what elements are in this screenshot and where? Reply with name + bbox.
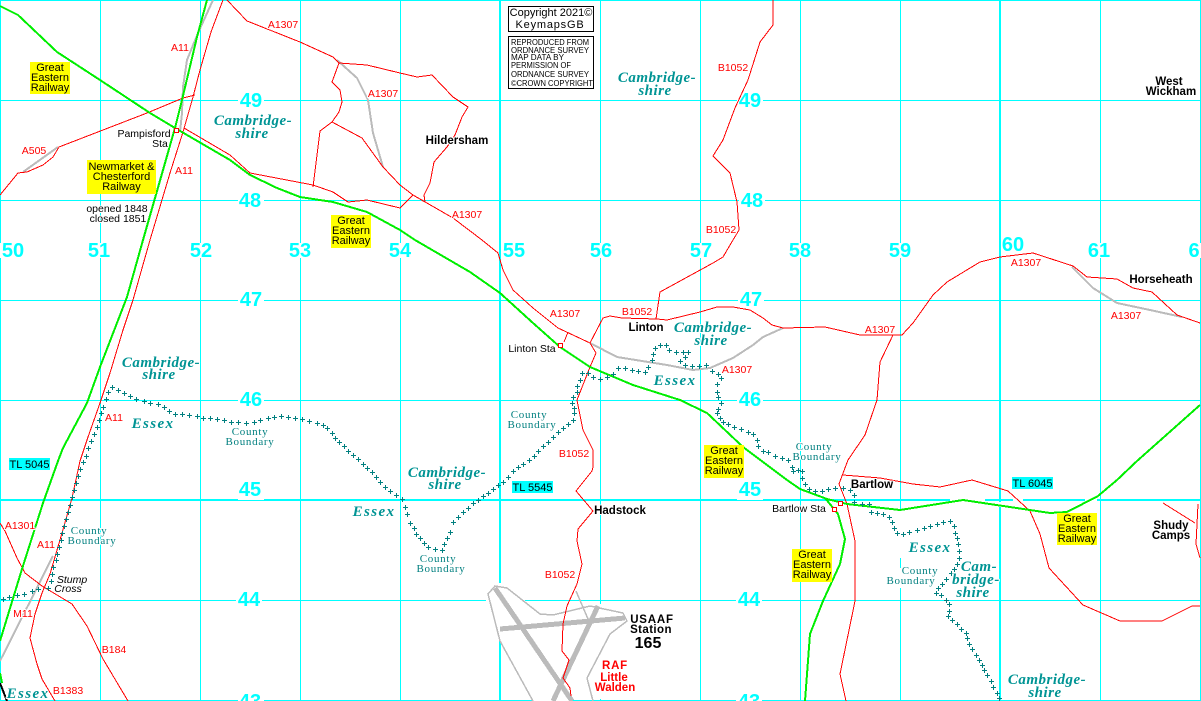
label: Great Eastern Railway, east: Great: [1063, 513, 1091, 525]
label: Great Eastern Railway, Bartlow: Eastern: [793, 559, 831, 571]
road: A1307 east: [590, 253, 1200, 343]
road labels: B1052: [718, 62, 748, 74]
county labels: Cambridgeshire: Cambridge-: [674, 320, 752, 336]
label: Great Eastern Railway, Linton: [704, 445, 744, 478]
county boundary labels: Boundary: [417, 563, 465, 575]
county labels: Essex: Essex: [653, 373, 696, 389]
road: B1052 north: [656, 0, 773, 319]
county labels: Essex: Essex: [352, 504, 395, 520]
county labels: Essex: Essex: [131, 416, 174, 432]
Ordnance Survey permission box: [508, 36, 594, 88]
grid numbers: 44: [238, 589, 261, 611]
grid numbers: 45: [239, 479, 261, 501]
station markers: [174, 128, 842, 512]
county boundary labels: [68, 409, 938, 587]
grid numbers: 54: [389, 240, 412, 262]
road labels: A1307: [452, 209, 482, 221]
grid numbers: 47: [740, 289, 762, 311]
label: USAAF Station 165: USAAF: [630, 614, 674, 626]
road labels: A1307: [1011, 257, 1041, 269]
label: Great Eastern Railway, west: Railway: [31, 82, 70, 94]
grid square labels: TL 5045: [10, 459, 49, 471]
grid numbers: 57: [690, 240, 712, 262]
railway dates and station names: closed 1851: [90, 213, 146, 225]
label: Great Eastern Railway, Bartlow: Railway: [793, 569, 832, 581]
county labels: Cambridgeshire: Cambridge-: [122, 355, 200, 371]
place names: [426, 76, 1196, 542]
county labels: Cambridgeshire: Cambridge-: [408, 465, 486, 481]
place names: Wickham: [1146, 86, 1196, 98]
road labels: A1307: [722, 364, 752, 376]
road labels: A11: [171, 42, 189, 54]
grid numbers: 61: [1088, 240, 1110, 262]
label: USAAF Station 165: 165: [635, 635, 661, 652]
grid numbers: 59: [889, 240, 911, 262]
Ordnance Survey permission box: REPRODUCED FROM: [511, 38, 589, 47]
railway dates and station names: [86, 128, 826, 515]
county labels: Cambridgeshire: shire: [955, 585, 990, 601]
grid numbers: 56: [590, 240, 612, 262]
road: A1307 to Linton: [184, 128, 590, 343]
road: A1307 west: [227, 0, 468, 202]
place name: Stump Cross: Cross: [54, 583, 82, 595]
road labels: B184: [102, 644, 126, 656]
label: Newmarket and Chesterford Railway: Chesterford: [93, 171, 150, 183]
railway: Great Eastern main line: [0, 6, 1200, 513]
grid square labels: TL 5545: [513, 482, 552, 494]
county labels: Cambridgeshire: shire: [234, 126, 269, 142]
road: Shudy Camps: [1163, 503, 1195, 523]
railway: Bartlow branch: [805, 498, 845, 701]
county labels: Cambridgeshire: shire: [427, 477, 462, 493]
place names: Horseheath: [1129, 274, 1193, 286]
grid numbers: 45: [739, 479, 761, 501]
county boundary labels: Boundary: [508, 419, 556, 431]
label: Newmarket and Chesterford Railway: Railway: [102, 181, 141, 193]
county boundary labels: County: [511, 409, 547, 421]
label: USAAF Station 165: Station: [630, 624, 672, 636]
road labels: B1052: [706, 224, 736, 236]
copyright box: KeymapsGB: [516, 19, 584, 31]
road labels: A505: [22, 145, 46, 157]
county labels: Cambridgeshire: shire: [1027, 685, 1062, 701]
grid numbers: 44: [738, 589, 761, 611]
railway dates and station names: Sta: [152, 138, 168, 150]
grid numbers: 53: [289, 240, 311, 262]
label: Newmarket and Chesterford Railway: [87, 160, 156, 194]
Ordnance Survey permission box: ORDNANCE SURVEY: [511, 70, 590, 79]
Ordnance Survey permission box: ©CROWN COPYRIGHT: [511, 79, 593, 88]
county boundary labels: Boundary: [887, 575, 935, 587]
label: Great Eastern Railway, centre: Railway: [332, 235, 371, 247]
label: Great Eastern Railway, Linton: Great: [710, 445, 738, 457]
county labels: Essex: Essex: [908, 540, 951, 556]
road labels: B1052: [622, 306, 652, 318]
county boundary labels: County: [71, 525, 107, 537]
county labels: Cambridgeshire: [122, 70, 1086, 701]
road labels: B1052: [559, 448, 589, 460]
road labels: A1307: [1111, 310, 1141, 322]
grid numbers: 51: [88, 240, 110, 262]
county labels: Cambridgeshire: Cambridge-: [1008, 672, 1086, 688]
label: Great Eastern Railway, east: Eastern: [1058, 523, 1096, 535]
grid numbers: 55: [503, 240, 525, 262]
road: A1301 and B184: [0, 523, 128, 701]
place names: Linton: [628, 322, 664, 334]
county labels: Cambridgeshire: bridge-: [952, 572, 1000, 588]
grid numbers: 47: [240, 289, 262, 311]
road: Bartlow north-south: [839, 335, 893, 701]
label: Great Eastern Railway, centre: Eastern: [332, 225, 370, 237]
road labels: A11: [105, 412, 123, 424]
county boundary labels: County: [232, 426, 268, 438]
road labels: A1301: [5, 520, 35, 532]
label: RAF Little Walden: [595, 660, 635, 694]
road labels: A1307: [368, 88, 398, 100]
label: Great Eastern Railway, Linton: Eastern: [705, 455, 743, 467]
road: Linton station link: [564, 332, 568, 342]
road labels: B1052: [545, 569, 575, 581]
railway dates and station names: Pampisford: [117, 128, 171, 140]
place name: Stump Cross: Stump: [57, 574, 87, 586]
grid numbers: 50: [2, 240, 24, 262]
county labels: Cambridgeshire: Cambridge-: [214, 113, 292, 129]
place names: Camps: [1152, 530, 1190, 542]
label: Newmarket and Chesterford Railway: Newmarket &: [88, 161, 155, 173]
railway name labels: [30, 62, 1097, 582]
grid numbers: 48: [239, 190, 261, 212]
label: USAAF Station 165: [630, 614, 674, 652]
road: Bartlow to Shudy Camps: [843, 475, 1200, 621]
road labels: A1307: [550, 308, 580, 320]
label: Great Eastern Railway, centre: Great: [337, 215, 365, 227]
county labels: Cambridgeshire: Cambridge-: [618, 70, 696, 86]
grid square labels: TL 6045: [1013, 478, 1052, 490]
label: Great Eastern Railway, west: Great: [36, 62, 64, 74]
railway dates and station names: opened 1848: [86, 203, 148, 215]
label: Great Eastern Railway, centre: [331, 215, 371, 248]
road labels: A1307: [268, 19, 298, 31]
Ordnance Survey permission box: MAP DATA BY: [511, 53, 565, 62]
county boundary labels: County: [796, 441, 832, 453]
county labels: Cambridgeshire: shire: [637, 83, 672, 99]
label: RAF Little Walden: RAF: [602, 660, 628, 672]
railway dates and station names: Linton Sta: [508, 343, 556, 355]
grid numbers: 48: [741, 190, 763, 212]
place name: Stump Cross: [54, 574, 87, 595]
airfield: USAAF Station 165: [488, 586, 627, 701]
county labels: Cambridgeshire: shire: [693, 333, 728, 349]
road: Hildersham links: [313, 63, 342, 187]
road labels: A1307: [865, 324, 895, 336]
place names: Bartlow: [851, 479, 893, 491]
Ordnance Survey permission box: ORDNANCE SURVEY: [511, 46, 590, 55]
place names: West: [1155, 76, 1183, 88]
grid square labels: [9, 458, 1053, 494]
label: Great Eastern Railway, east: Railway: [1058, 533, 1097, 545]
grid numbers: 58: [789, 240, 811, 262]
copyright box: Copyright 2021©: [510, 7, 592, 19]
railway: Newmarket and Chesterford: [0, 0, 207, 641]
county labels: Essex: [6, 373, 951, 701]
label: Great Eastern Railway, east: [1057, 513, 1097, 545]
place names: Hildersham: [426, 135, 488, 147]
label: RAF Little Walden: Walden: [595, 682, 635, 694]
grid numbers: 49: [240, 90, 262, 112]
label: RAF Little Walden: Little: [600, 672, 628, 684]
county boundary labels: County: [902, 565, 938, 577]
label: Great Eastern Railway, west: Eastern: [31, 72, 69, 84]
county labels: Cambridgeshire: Cam-: [961, 559, 997, 575]
road labels: A11: [175, 165, 193, 177]
county boundary labels: Boundary: [68, 535, 116, 547]
place names: Shudy: [1153, 520, 1189, 532]
road labels: A11: [37, 539, 55, 551]
grid numbers: 46: [739, 389, 761, 411]
county boundary crosses: [3, 345, 999, 698]
grid numbers: 60: [1002, 234, 1024, 256]
county labels: Cambridgeshire: shire: [141, 367, 176, 383]
county boundary labels: Boundary: [793, 451, 841, 463]
railway dates and station names: Bartlow Sta: [772, 503, 826, 515]
grid numbers: 49: [739, 90, 761, 112]
road labels: B1383: [53, 685, 83, 697]
label: Great Eastern Railway, Linton: Railway: [705, 465, 744, 477]
road: A505: [0, 95, 195, 195]
label: Great Eastern Railway, west: [30, 62, 70, 94]
place names: Hadstock: [594, 505, 646, 517]
grid numbers: 6: [1188, 240, 1200, 262]
Ordnance Survey permission box: PERMISSION OF: [511, 61, 571, 70]
label: Great Eastern Railway, Bartlow: Great: [798, 549, 826, 561]
county boundary labels: County: [420, 553, 456, 565]
copyright box: [508, 6, 594, 32]
road: A11: [30, 0, 223, 701]
road: B1052 through Hadstock: [562, 343, 596, 696]
label: Great Eastern Railway, Bartlow: [792, 549, 832, 582]
grid numbers: 52: [190, 240, 212, 262]
road labels: M11: [13, 608, 33, 620]
county boundary labels: Boundary: [226, 436, 274, 448]
grid numbers: 46: [240, 389, 262, 411]
